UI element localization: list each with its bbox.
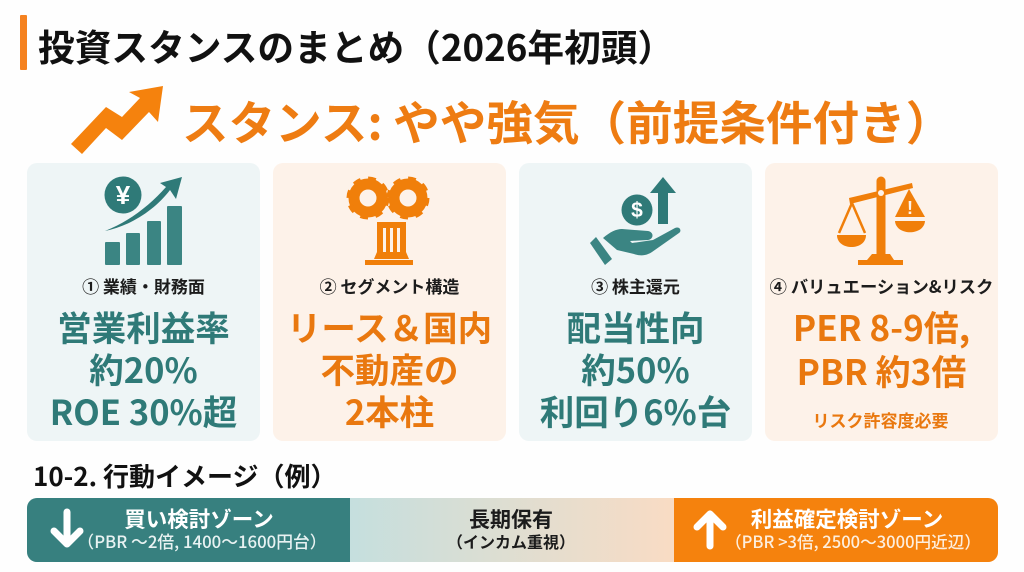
action zone bar	[27, 498, 998, 562]
card figures: 不動産の	[320, 343, 458, 393]
card figures: ROE 30%超	[50, 385, 237, 435]
panel: valuation and risk	[765, 163, 998, 441]
card figures: 約20%	[89, 343, 198, 393]
card figures: 約50%	[581, 343, 690, 393]
icon: hand with dollar coin: $	[631, 199, 643, 222]
icon: hand with dollar coin	[590, 177, 680, 265]
card figures: 営業利益率	[57, 301, 230, 351]
section heading: 10-2. 行動イメージ（例）	[33, 457, 336, 494]
icon: gears and pillar	[346, 176, 430, 265]
zone: long-term hold	[447, 504, 575, 553]
card figures	[50, 301, 237, 435]
zone: take profit	[674, 498, 998, 562]
icon: yen growth chart	[104, 176, 182, 265]
buy zone detail: （PBR ～2倍, 1400～1600円台）	[77, 529, 327, 553]
zone: buy	[27, 498, 350, 562]
panel: shareholder returns	[519, 163, 752, 441]
icon: balance scale with warning: !	[907, 198, 913, 218]
icon: rising zigzag arrow	[71, 86, 163, 154]
panel: earnings and financials	[27, 163, 260, 441]
card figures	[793, 301, 970, 396]
buy zone text: 買い検討ゾーン	[124, 503, 274, 534]
card figures: 配当性向	[566, 301, 704, 351]
card figures	[287, 301, 492, 435]
card figures: 利回り6%台	[540, 385, 731, 435]
risk note: リスク許容度必要	[812, 407, 948, 432]
card label: ④ バリュエーション&リスク	[770, 273, 993, 298]
icon: up arrow	[694, 510, 726, 550]
card label: ① 業績・財務面	[82, 273, 205, 298]
panel: segment structure	[273, 163, 506, 441]
card figures: PBR 約3倍	[797, 345, 966, 396]
card label: ② セグメント構造	[320, 273, 459, 298]
icon: yen growth chart: ¥	[116, 180, 131, 210]
card figures	[540, 301, 731, 435]
card label: ③ 株主還元	[591, 273, 680, 298]
profit zone text: 利益確定検討ゾーン	[751, 503, 943, 534]
hold text: 長期保有	[469, 504, 553, 534]
profit zone detail: （PBR >3倍, 2500～3000円近辺）	[725, 529, 981, 553]
title accent bar	[20, 15, 27, 70]
icon: balance scale with warning	[837, 176, 925, 265]
card figures: 2本柱	[345, 385, 434, 435]
hold detail: （インカム重視）	[447, 529, 575, 553]
card figures: リース＆国内	[287, 301, 492, 351]
stance heading: スタンス: やや強気（前提条件付き）	[182, 87, 952, 154]
title: 投資スタンスのまとめ（2026年初頭）	[38, 18, 674, 72]
icon: down arrow	[50, 508, 84, 548]
card figures: PER 8-9倍,	[793, 301, 970, 352]
